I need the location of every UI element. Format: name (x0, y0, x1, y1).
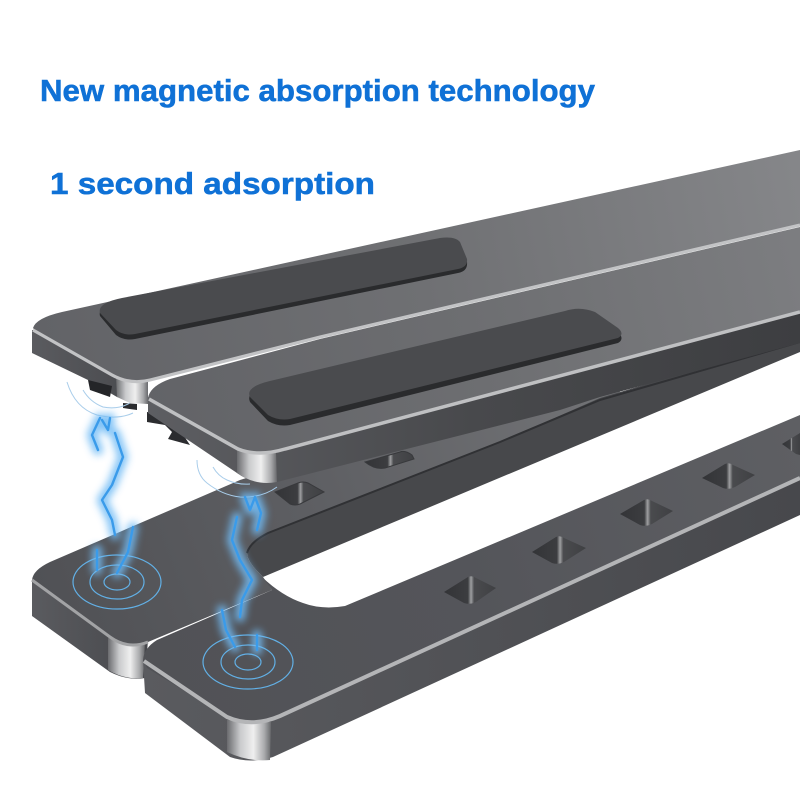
magnetic pad (100, 238, 467, 340)
hole (782, 433, 800, 455)
magnetic rings: top left (67, 382, 133, 417)
dark inner arm (247, 338, 800, 577)
magnetic rings: left foot (73, 555, 161, 609)
magnetic rings: front bar (203, 635, 293, 689)
front upper plate (147, 227, 800, 483)
headline: technology: New magnetic absorption technology (40, 73, 596, 108)
metal end cap (237, 450, 277, 483)
back upper plate (32, 150, 800, 410)
lightning: right (222, 497, 261, 650)
notch under plate (88, 380, 112, 397)
hole (620, 499, 673, 526)
hole (275, 482, 324, 505)
hole (444, 576, 496, 604)
magnetic rings: top right (197, 460, 277, 497)
hole (532, 536, 586, 564)
lower left foot with holes (32, 360, 620, 679)
hole (702, 463, 755, 489)
hole (365, 451, 414, 468)
lower front bar with holes (143, 415, 800, 760)
magnetic pad (249, 309, 621, 426)
metal end cap (116, 376, 148, 404)
headline: adsorption speed: 1 second adsorption (50, 166, 375, 201)
stepped dark notch (147, 412, 190, 445)
lightning: left (92, 418, 133, 573)
